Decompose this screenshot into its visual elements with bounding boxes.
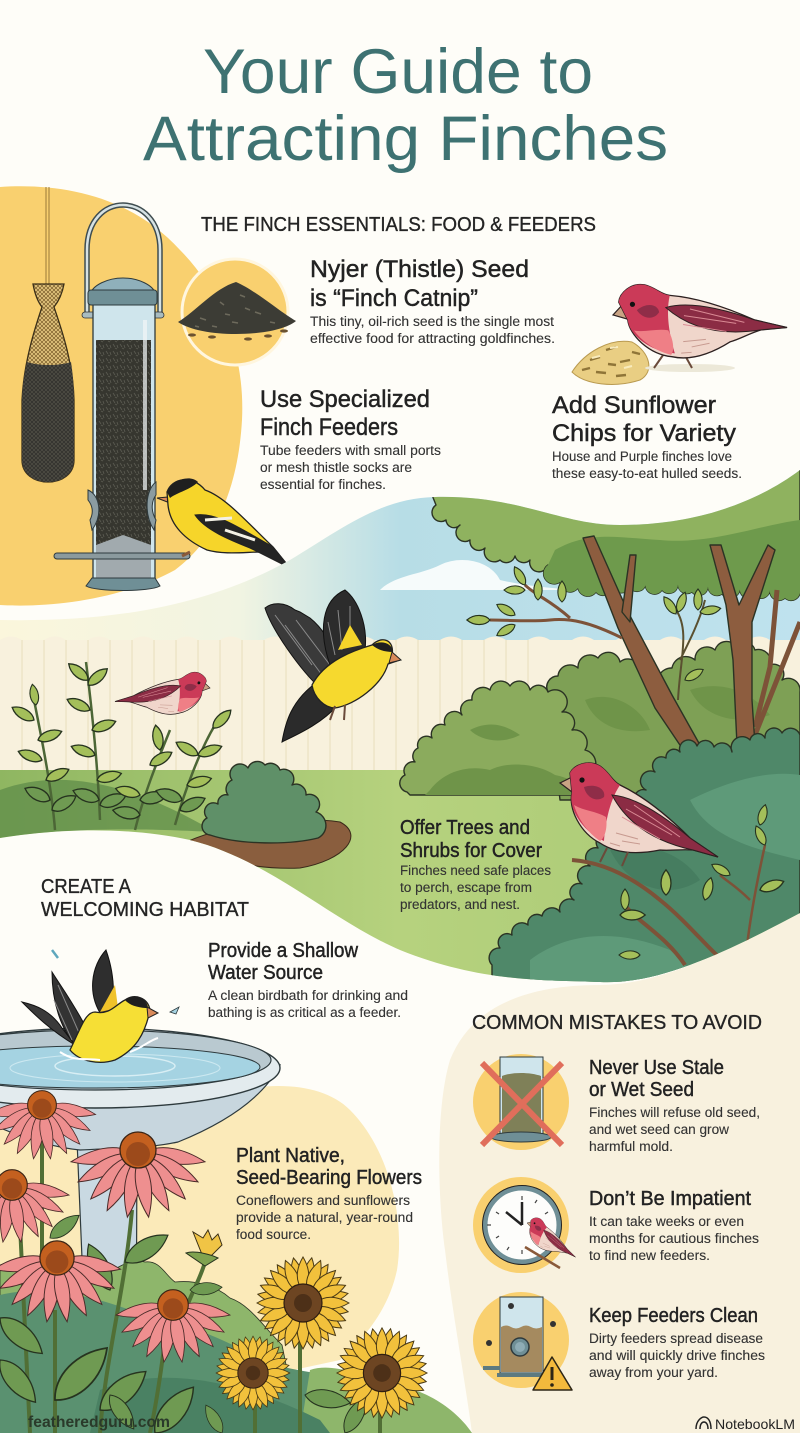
pale yellow blob behind flowers [0, 1086, 399, 1370]
big purple finch on branch [560, 763, 718, 857]
heading: create a welcoming habitat [40, 878, 249, 916]
text: sunflower chips [552, 392, 742, 481]
yellow blob behind feeders [0, 186, 242, 606]
back shrubs [660, 640, 800, 746]
text: specialized feeders: Finch Feeders [260, 414, 398, 441]
text: trees and shrubs: Offer Trees and [400, 817, 530, 839]
left plants [10, 660, 234, 830]
text: native flowers: Plant Native, [236, 1145, 345, 1167]
text: sunflower chips: House and Purple finches love [552, 449, 732, 464]
pale cream panel: common mistakes [439, 913, 800, 1433]
text: trees and shrubs [400, 817, 551, 912]
illustration: bathing goldfinch [22, 950, 179, 1062]
small round shrub [202, 761, 326, 843]
bud [193, 1230, 222, 1262]
text: trees and shrubs: predators, and nest. [400, 897, 520, 912]
stems [20, 1140, 380, 1433]
illustration: purple finch with sunflower chips [571, 284, 788, 385]
text: trees and shrubs: to perch, escape from [400, 880, 532, 895]
text: stale seed: Never Use Stale [589, 1057, 724, 1079]
illustration: flower garden [0, 1091, 472, 1433]
text: sunflower chips: Chips for Variety [552, 420, 736, 447]
text: native flowers: Seed-Bearing Flowers [236, 1167, 422, 1189]
text: keep feeders clean: Dirty feeders spread disease [589, 1331, 763, 1346]
text: water source: bathing is as critical as a feeder. [208, 1005, 401, 1020]
text: trees and shrubs: Finches need safe places [400, 863, 551, 878]
fence [0, 636, 800, 775]
text: stale seed: Finches will refuse old seed, [589, 1105, 760, 1120]
heading: common mistakes: COMMON MISTAKES TO AVOID [472, 1012, 762, 1034]
illustration: flying goldfinch [265, 590, 401, 742]
watermark: featheredguru.com: featheredguru.com [28, 1414, 170, 1431]
illustration: tube feeder [54, 205, 190, 590]
text: water source: Water Source [208, 962, 323, 984]
text: stale seed: and wet seed can grow [589, 1122, 729, 1137]
text: stale seed [589, 1057, 760, 1154]
coneflowers [0, 1091, 97, 1160]
text: specialized feeders: or mesh thistle socks are [260, 460, 412, 475]
text: nyjer seed: effective food for attracting goldfinches. [310, 331, 555, 346]
text: native flowers: provide a natural, year-round [236, 1210, 413, 1225]
text: stale seed: harmful mold. [589, 1139, 673, 1154]
soil patch [180, 820, 351, 868]
text: water source: Provide a Shallow [208, 940, 359, 962]
text: keep feeders clean: Keep Feeders Clean [589, 1305, 758, 1327]
illustration: perched goldfinch [157, 478, 290, 568]
text: don't be impatient: to find new feeders. [589, 1248, 710, 1263]
text: sunflower chips: Add Sunflower [552, 392, 716, 419]
text: keep feeders clean: and will quickly drive finches [589, 1348, 765, 1363]
illustration: thistle sock feeder [22, 187, 74, 482]
text: specialized feeders: Tube feeders with small ports [260, 443, 441, 458]
heading: the finch essentials: THE FINCH ESSENTIALS: FOOD & FEEDERS [201, 214, 596, 236]
panel: backyard scene [0, 465, 800, 1000]
text: keep feeders clean: away from your yard. [589, 1365, 718, 1380]
text: water source [208, 940, 408, 1020]
text: native flowers: food source. [236, 1227, 311, 1242]
leaves [50, 1214, 80, 1239]
text: specialized feeders [260, 386, 441, 492]
text: keep feeders clean [589, 1305, 765, 1380]
illustration: birdbath [0, 1028, 281, 1267]
text: stale seed: or Wet Seed [589, 1079, 694, 1101]
text: nyjer seed: Nyjer (Thistle) Seed [310, 256, 529, 283]
foreground dark shrub [489, 728, 800, 985]
heading: create a welcoming habitat: WELCOMING HABITAT [41, 899, 249, 921]
text: specialized feeders: essential for finches. [260, 477, 386, 492]
logo: NotebookLM: NotebookLM [715, 1416, 795, 1432]
text: native flowers: Coneflowers and sunflowers [236, 1193, 410, 1208]
title: Attracting Finches [143, 104, 668, 174]
text: don't be impatient [589, 1188, 759, 1263]
branch and lower leaves [572, 804, 785, 965]
text: don't be impatient: months for cautious finches [589, 1231, 759, 1246]
text: nyjer seed: is “Finch Catnip” [310, 285, 478, 312]
text: sunflower chips: these easy-to-eat hulled seeds. [552, 466, 742, 481]
text: don't be impatient: Don’t Be Impatient [589, 1188, 751, 1210]
small purple finch on plant [114, 672, 210, 715]
back light shrubs [0, 1261, 288, 1368]
title: Your Guide to [203, 37, 593, 107]
sunflowers [257, 1257, 349, 1349]
text: water source: A clean birdbath for drinking and [208, 988, 408, 1003]
clouds [380, 560, 590, 590]
grass [0, 770, 800, 1000]
icon: stale seed feeder crossed out [473, 1054, 569, 1150]
text: nyjer seed [310, 256, 555, 346]
icon: nyjer seed circle [178, 259, 296, 365]
text: trees and shrubs: Shrubs for Cover [400, 840, 542, 862]
canopy [430, 465, 800, 600]
text: nyjer seed: This tiny, oil-rich seed is the single most [310, 314, 554, 329]
text: don't be impatient: It can take weeks or even [589, 1214, 744, 1229]
trees [467, 536, 800, 757]
heading: create a welcoming habitat: CREATE A [41, 876, 132, 898]
text: native flowers [236, 1145, 422, 1242]
icon: dirty feeder with warning [473, 1292, 572, 1390]
title [143, 37, 668, 174]
icon: clock with finch [473, 1177, 581, 1273]
text: specialized feeders: Use Specialized [260, 386, 430, 413]
sky [0, 470, 800, 645]
